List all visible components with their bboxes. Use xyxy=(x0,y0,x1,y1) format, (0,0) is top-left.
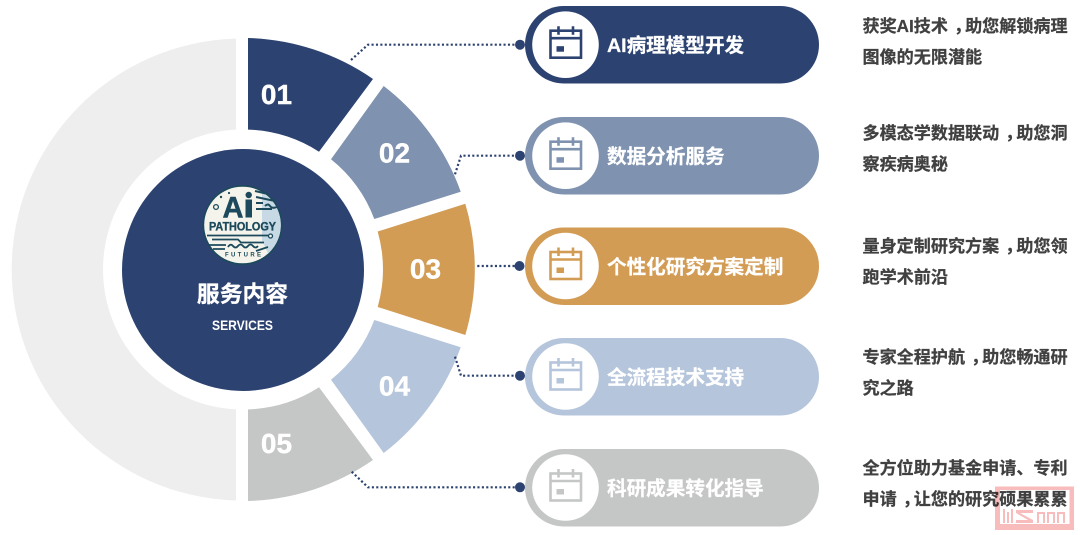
pill 03: 个性化研究方案定制 xyxy=(607,256,783,278)
description 03 xyxy=(862,236,1068,287)
description 03: 量身定制研究方案 ，助您领 xyxy=(862,236,1068,256)
description 04: 专家全程护航 ，助您畅通研 xyxy=(862,347,1068,367)
description 05: 全方位助力基金申请、专利 xyxy=(862,458,1068,478)
centre heading: 服务内容 xyxy=(197,281,288,307)
icon: calendar xyxy=(550,469,581,500)
pill 02: 数据分析服务 xyxy=(607,146,725,168)
pill 05: 科研成果转化指导 xyxy=(607,477,764,500)
connector 03 xyxy=(477,261,524,271)
description 02: 察疾病奥秘 xyxy=(862,154,948,174)
description 04: 究之路 xyxy=(862,378,914,398)
ring segment 02: 02 xyxy=(379,138,410,168)
ring segment 03 xyxy=(378,204,475,335)
pill 02 xyxy=(525,117,819,194)
pill 03 xyxy=(525,228,819,305)
description 01: 获奖AI技术 ，助您解锁病理 xyxy=(862,16,1068,36)
connector 05 xyxy=(352,472,525,492)
description 02 xyxy=(862,123,1068,174)
ring segment 02 xyxy=(331,86,461,219)
description 05: 申请 ，让您的研究硕果累累 xyxy=(862,489,1068,509)
ring segment 05: 05 xyxy=(261,428,292,459)
pill 01: AI病理模型开发 xyxy=(607,34,745,57)
description 05 xyxy=(862,458,1068,509)
ring segment 04: 04 xyxy=(379,370,410,402)
grey half ring background xyxy=(12,38,236,500)
watermark stamp xyxy=(995,486,1074,530)
centre subheading: SERVICES xyxy=(212,317,273,333)
description 01 xyxy=(862,16,1068,67)
logo: AI Pathology Future: A xyxy=(222,192,244,224)
logo: AI Pathology Future: PATHOLOGY xyxy=(209,222,276,234)
pill 05 xyxy=(525,449,819,526)
description 01: 图像的无限潜能 xyxy=(862,48,982,67)
ring segment 03: 03 xyxy=(410,254,441,284)
icon: calendar xyxy=(550,248,581,279)
ring segment 01 xyxy=(248,38,373,152)
centre circle xyxy=(122,149,364,391)
icon: calendar xyxy=(550,26,581,58)
logo: AI Pathology Future xyxy=(202,185,282,265)
logo: AI Pathology Future: FUTURE xyxy=(225,252,261,258)
description 03: 跑学术前沿 xyxy=(862,267,948,287)
ring segment 04 xyxy=(331,320,461,453)
connector 04 xyxy=(455,357,525,381)
pill 01 xyxy=(525,6,819,84)
ring segment 05 xyxy=(248,387,373,501)
pill 04 xyxy=(525,338,819,416)
pill 04: 全流程技术支持 xyxy=(607,366,744,389)
description 04 xyxy=(862,347,1068,398)
description 02: 多模态学数据联动 ，助您洞 xyxy=(862,123,1068,143)
icon: calendar xyxy=(550,137,581,169)
connector 01 xyxy=(351,40,525,60)
ring segment 01: 01 xyxy=(261,79,292,110)
connector 02 xyxy=(455,151,525,174)
icon: calendar xyxy=(550,358,581,390)
